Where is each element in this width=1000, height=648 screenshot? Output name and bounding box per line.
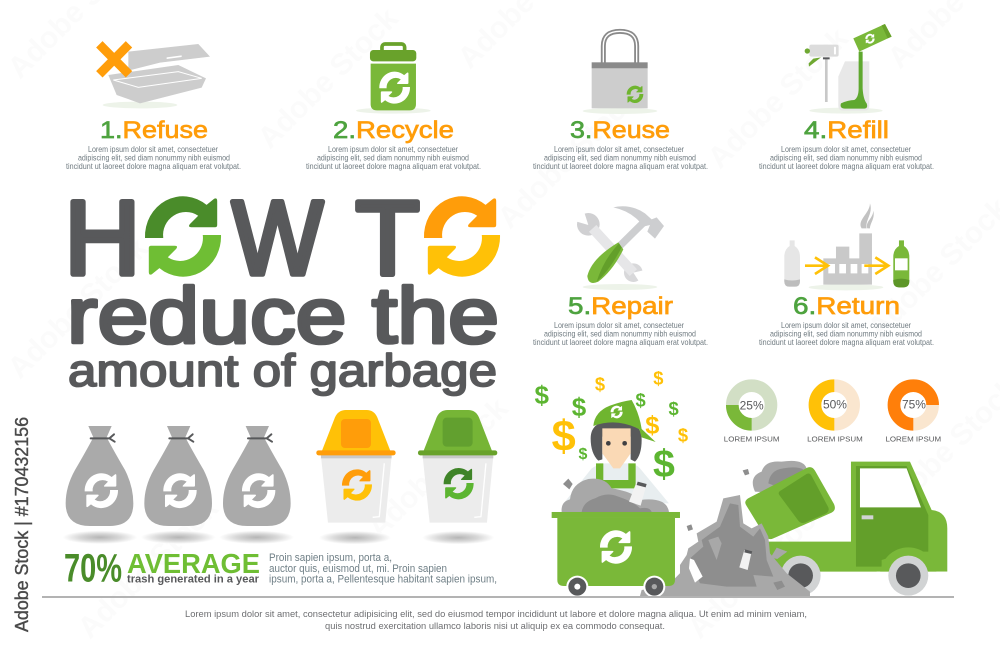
text block: refill description: adipiscing elit, sed diam nonummy nibh euismod	[770, 152, 922, 162]
text: Adobe Stock	[492, 82, 645, 235]
chart: 25% donut: 25%	[740, 398, 764, 412]
chart: 75% donut: 75%	[902, 398, 926, 412]
panel: step 3 reuse	[533, 31, 708, 171]
heading: 2.Recycle: 2.Recycle	[333, 117, 454, 144]
icon: yellow bin	[316, 410, 396, 523]
text block: footer description	[185, 609, 807, 632]
title letter T: T	[356, 180, 420, 297]
icons: dollar signs: $	[653, 442, 675, 486]
text block: recycle description	[306, 144, 481, 171]
icon: wrench and hammer	[573, 206, 664, 290]
watermark: Adobe Stock id: Adobe Stock | #170432156	[12, 417, 32, 632]
panel: step 4 refill	[759, 24, 934, 171]
text block: refuse description: tincidunt ut laoreet dolore magna aliquam erat volutpat.	[66, 161, 241, 171]
text block: proin description: auctor quis, euismod ut, mi. Proin sapien	[269, 563, 447, 575]
text: Adobe Stock	[702, 22, 855, 175]
icons: dollar signs: $	[678, 424, 688, 445]
panel: step 2 recycle	[306, 44, 481, 171]
illustration: tipping truck bin with trash	[743, 461, 835, 539]
panel: step 1 refuse	[66, 44, 241, 171]
icons: dollar signs: $	[653, 368, 663, 389]
text block: proin description: ipsum, porta a, Pellentesque habitant sapien ipsum,	[269, 574, 497, 586]
stat: 70%: 70%	[64, 546, 122, 590]
chart: 25% donut	[724, 386, 779, 444]
text block: refuse description: adipiscing elit, sed diam nonummy nibh euismod	[78, 152, 230, 162]
title line: amount of garbage: amount of garbage	[68, 345, 497, 396]
title line: reduce the: reduce the	[67, 270, 499, 360]
heading: 3.Reuse: 3.Reuse	[570, 117, 670, 144]
text: Adobe Stock	[252, 2, 405, 155]
icon: garbage bag 1	[66, 426, 133, 526]
icons: dollar signs: $	[645, 411, 659, 439]
title letter H: H	[64, 180, 140, 297]
text: Adobe Stock	[682, 492, 835, 645]
panel: step 5 repair	[533, 206, 708, 347]
illustration: dumpster	[552, 512, 680, 598]
ground shadows	[63, 531, 494, 544]
illustration: worker, dumpster, truck and charts	[534, 368, 950, 605]
icons: dollar signs: $	[534, 380, 549, 410]
icons: dollar signs	[534, 368, 688, 486]
text block: proin description	[269, 552, 497, 586]
icons: dollar signs: $	[636, 390, 646, 411]
heading: 4.Refill: 4.Refill	[804, 117, 889, 144]
icon: refused food box	[99, 44, 210, 108]
text block: repair description: adipiscing elit, sed diam nonummy nibh euismod	[544, 328, 696, 338]
panel: 70% average statistic	[64, 546, 497, 590]
chart: 75% donut	[885, 386, 941, 444]
icons: dollar signs: $	[579, 446, 588, 463]
title: How to reduce the amount of garbage	[64, 180, 500, 396]
text block: refill description: Lorem ipsum dolor sit amet, consectetuer	[781, 144, 911, 154]
text block: recycle description: adipiscing elit, sed diam nonummy nibh euismod	[317, 152, 469, 162]
icon: bottle return factory	[784, 203, 909, 290]
text block: footer description: quis nostrud exercitation ullamco laboris nisi ut aliquip ex ea commodo consequat.	[325, 621, 665, 632]
heading: 6.Return: 6.Return	[793, 293, 900, 320]
chart: 50% donut: 50%	[823, 398, 847, 412]
text block: return description	[759, 320, 934, 347]
chart: 50% donut	[807, 386, 863, 444]
icon: garbage bag 2	[144, 426, 212, 526]
text block: repair description	[533, 320, 708, 347]
title letter W: W	[232, 180, 323, 297]
caption: trash generated in a year: trash generated in a year	[127, 574, 260, 586]
text block: reuse description: Lorem ipsum dolor sit amet, consectetuer	[554, 144, 684, 154]
icon: garbage bag 3	[223, 426, 291, 526]
text block: reuse description	[533, 144, 708, 171]
text block: repair description: tincidunt ut laoreet dolore magna aliquam erat volutpat.	[533, 337, 708, 347]
icons: dollar signs: $	[572, 392, 587, 422]
icon: green bin	[418, 410, 497, 523]
text block: repair description: Lorem ipsum dolor sit amet, consectetuer	[554, 320, 684, 330]
text block: return description: Lorem ipsum dolor sit amet, consectetuer	[781, 320, 911, 330]
icons: dollar signs: $	[595, 374, 605, 395]
text block: return description: adipiscing elit, sed diam nonummy nibh euismod	[770, 328, 922, 338]
heading: average: AVERAGE	[127, 548, 260, 579]
text block: reuse description: tincidunt ut laoreet dolore magna aliquam erat volutpat.	[533, 161, 708, 171]
text block: refill description	[759, 144, 934, 171]
icon: orange recycle O	[424, 196, 500, 277]
ground line	[42, 596, 954, 598]
panel: trash bags and bins	[63, 410, 497, 544]
text block: recycle description: Lorem ipsum dolor sit amet, consectetuer	[328, 144, 458, 154]
icon: green recycle O	[145, 196, 221, 277]
illustration: trash in dumpster	[562, 479, 669, 512]
text block: return description: tincidunt ut laoreet dolore magna aliquam erat volutpat.	[759, 337, 934, 347]
illustration: truck	[763, 462, 950, 605]
text block: refuse description: Lorem ipsum dolor sit amet, consectetuer	[88, 144, 218, 154]
illustration: garbage pile	[640, 495, 810, 596]
icons: dollar signs: $	[552, 413, 576, 461]
text block: refuse description	[66, 144, 241, 171]
text: Adobe Stock	[362, 392, 515, 545]
panel: step 6 return	[759, 203, 934, 347]
icon: recycle bin	[356, 44, 431, 114]
text block: refill description: tincidunt ut laoreet dolore magna aliquam erat volutpat.	[759, 161, 934, 171]
icon: reusable tote bag	[583, 31, 657, 114]
text block: recycle description: tincidunt ut laoreet dolore magna aliquam erat volutpat.	[306, 161, 481, 171]
icon: refill spray bottle	[805, 24, 892, 114]
icons: dollar signs: $	[669, 398, 679, 419]
text: Adobe Stock	[2, 232, 155, 385]
chart: 50% donut: LOREM IPSUM	[807, 435, 863, 444]
illustration: worker	[565, 400, 669, 503]
chart: 25% donut: LOREM IPSUM	[724, 435, 779, 444]
text: Adobe Stock	[72, 492, 225, 645]
text block: footer description: Lorem ipsum dolor sit amet, consectetur adipisicing elit, sed do eiusmod tempor incididunt ut labore et dolore magna aliqua. Ut enim ad minim veniam,	[185, 609, 807, 620]
heading: 5.Repair: 5.Repair	[568, 293, 673, 320]
text block: reuse description: adipiscing elit, sed diam nonummy nibh euismod	[544, 152, 696, 162]
heading: 1.Refuse: 1.Refuse	[100, 117, 208, 144]
text block: proin description: Proin sapien ipsum, porta a,	[269, 552, 392, 564]
chart: 75% donut: LOREM IPSUM	[885, 435, 941, 444]
